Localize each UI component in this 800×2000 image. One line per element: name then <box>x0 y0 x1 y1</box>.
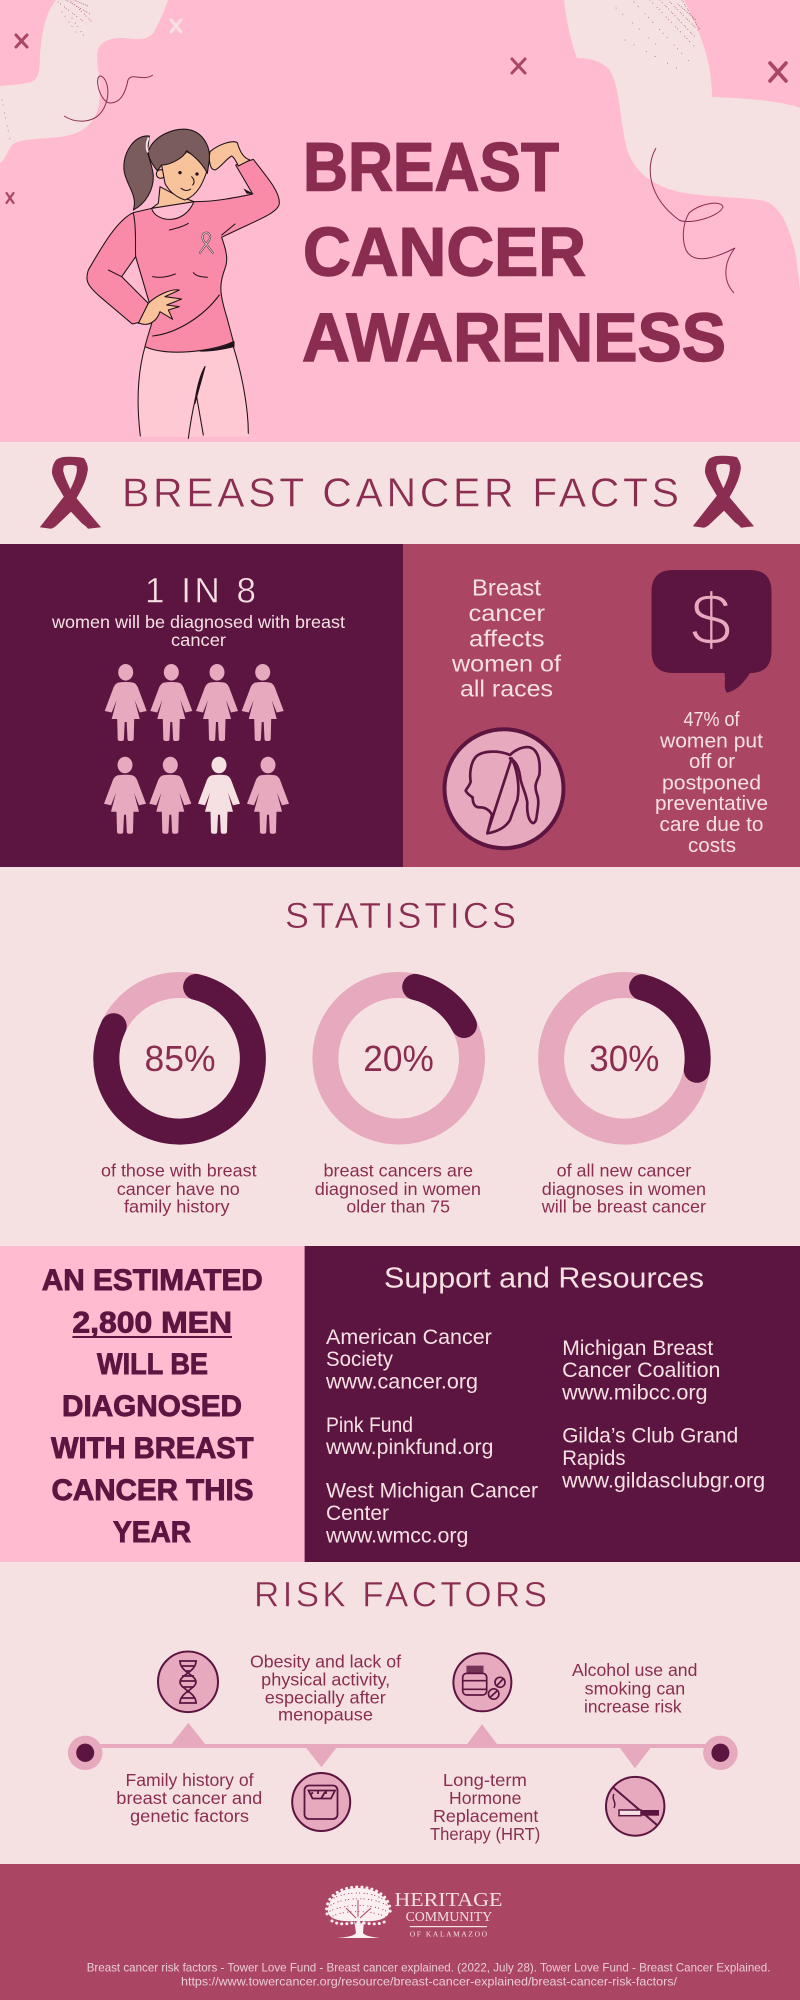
illustration: woman flexing with ribbon <box>87 129 279 438</box>
text: alcohol and smoking: Alcohol use and <box>572 1660 697 1680</box>
citation <box>87 1961 770 1989</box>
text: obesity: especially after <box>265 1687 386 1707</box>
resource list: right column: Gilda’s Club Grand <box>562 1425 738 1448</box>
caption: new diagnoses: diagnoses in women <box>542 1179 706 1199</box>
hero panel <box>0 0 800 442</box>
donut chart: 20 percent <box>325 985 472 1132</box>
text: obesity: physical activity, <box>261 1669 390 1689</box>
donut chart: 20 percent: 20% <box>363 1038 434 1079</box>
heading: breast cancer facts: BREAST CANCER FACTS <box>122 470 679 516</box>
panel: 2,800 men <box>0 1246 305 1562</box>
heading: statistics: STATISTICS <box>285 895 516 936</box>
callout text: AN ESTIMATED <box>42 1264 263 1297</box>
caption: no family history: of those with breast <box>101 1161 257 1181</box>
callout text: WITH BREAST <box>51 1432 254 1465</box>
resource list: left column <box>325 1326 538 1548</box>
text: family history <box>116 1770 262 1826</box>
resource list: left column: Society <box>326 1348 393 1371</box>
logo: heritage community of kalamazoo: HERITAGE <box>394 1889 502 1911</box>
text: obesity: Obesity and lack of <box>250 1651 401 1671</box>
text: 47 percent postponed care <box>655 709 768 857</box>
timeline <box>68 1723 738 1770</box>
donut chart: 30 percent <box>551 985 698 1132</box>
text: alcohol and smoking: increase risk <box>584 1696 682 1716</box>
icon: woman profile <box>444 729 564 848</box>
icon: pills <box>453 1653 511 1711</box>
callout text: WILL BE <box>97 1348 208 1381</box>
citation: https://www.towercancer.org/resource/breast-cancer-explained/breast-cancer-risk-factors/ <box>181 1975 678 1989</box>
stat: 1 in 8: 1 IN 8 <box>145 572 256 610</box>
caption: older than 75: diagnosed in women <box>315 1179 481 1199</box>
title: CANCER <box>303 214 586 290</box>
text: hormone therapy: Replacement <box>433 1806 538 1826</box>
caption: older than 75: breast cancers are <box>324 1161 473 1181</box>
text: hormone therapy <box>430 1770 540 1844</box>
logo: heritage community of kalamazoo: OF KALAMAZOO <box>410 1930 488 1939</box>
text: family history: Family history of <box>126 1770 254 1790</box>
resource list: left column: www.pinkfund.org <box>325 1436 493 1459</box>
icon row: women row one <box>105 664 284 741</box>
callout text: 2,800 MEN <box>72 1307 232 1340</box>
panel: races and cost <box>403 544 800 867</box>
text: obesity: menopause <box>278 1705 373 1725</box>
caption: no family history: cancer have no <box>117 1179 240 1199</box>
callout text <box>42 1264 263 1549</box>
resource list: right column <box>561 1337 765 1492</box>
panel: 1 in 8 <box>0 544 403 867</box>
caption: older than 75 <box>315 1161 481 1217</box>
text: 47 percent postponed care: women put <box>659 730 763 752</box>
text: family history: genetic factors <box>130 1806 249 1826</box>
resource list: left column: Center <box>326 1502 389 1525</box>
callout text: YEAR <box>113 1516 191 1549</box>
resource list: right column: Michigan Breast <box>562 1337 713 1360</box>
background blob: top right <box>564 0 800 290</box>
icon: ribbon right <box>693 456 754 528</box>
donut chart: 85 percent <box>106 985 253 1132</box>
text: affects women of all races: Breast <box>472 575 542 601</box>
text: family history: breast cancer and <box>116 1788 262 1808</box>
callout text: CANCER THIS <box>52 1474 254 1507</box>
icon: dollar speech bubble <box>652 570 772 693</box>
text: 47 percent postponed care: off or <box>689 751 735 773</box>
text: hormone therapy: Hormone <box>449 1788 521 1808</box>
icon: dollar speech bubble: $ <box>690 578 732 661</box>
heading: risk factors: RISK FACTORS <box>254 1576 547 1615</box>
title <box>302 128 726 376</box>
text: affects women of all races: all races <box>460 676 553 702</box>
text: alcohol and smoking: smoking can <box>585 1678 685 1698</box>
panel: statistics <box>0 867 800 1246</box>
text: women will be diagnosed: cancer <box>171 630 226 650</box>
text: affects women of all races <box>451 575 562 702</box>
text: 47 percent postponed care: 47% of <box>684 709 740 731</box>
text: hormone therapy: Therapy (HRT) <box>430 1824 540 1844</box>
caption: no family history <box>101 1161 257 1217</box>
donut chart: 30 percent: 30% <box>589 1038 659 1079</box>
text: 47 percent postponed care: care due to <box>660 814 764 836</box>
caption: no family history: family history <box>124 1197 230 1217</box>
resource list: right column: Cancer Coalition <box>562 1359 720 1382</box>
caption: new diagnoses: of all new cancer <box>557 1161 691 1181</box>
icon: ribbon left <box>40 457 101 529</box>
resource list: right column: Rapids <box>562 1447 626 1470</box>
text: 47 percent postponed care: costs <box>688 835 736 857</box>
facts heading band <box>0 442 800 544</box>
title: BREAST <box>303 128 559 206</box>
resource list: left column: Pink Fund <box>326 1414 413 1437</box>
squiggle left <box>64 75 153 121</box>
resource list: left column: www.cancer.org <box>325 1370 478 1393</box>
donut chart: 85 percent: 85% <box>144 1038 216 1079</box>
resource list: left column: www.wmcc.org <box>325 1525 468 1548</box>
text: affects women of all races: affects <box>469 626 544 652</box>
squiggle right <box>650 148 735 293</box>
background blob: top left <box>0 0 168 163</box>
callout text: DIAGNOSED <box>62 1390 242 1423</box>
panel: footer <box>0 1864 800 2000</box>
text: affects women of all races: cancer <box>468 600 545 626</box>
icon row: women row two <box>104 757 289 834</box>
resource list: right column: www.gildasclubgr.org <box>561 1469 765 1492</box>
resource list: right column: www.mibcc.org <box>561 1381 708 1404</box>
text: women will be diagnosed <box>51 612 345 650</box>
x marks <box>6 20 786 203</box>
text: hormone therapy: Long-term <box>443 1770 527 1790</box>
text: 47 percent postponed care: postponed <box>662 772 761 794</box>
caption: new diagnoses: will be breast cancer <box>541 1197 706 1217</box>
text: 47 percent postponed care: preventative <box>655 793 768 815</box>
logo: heritage community of kalamazoo <box>327 1887 502 1939</box>
text: affects women of all races: women of <box>451 651 562 677</box>
text: women will be diagnosed: women will be diagnosed with breast <box>51 612 345 632</box>
title: AWARENESS <box>302 299 726 376</box>
resource list: left column: American Cancer <box>326 1326 492 1349</box>
caption: new diagnoses <box>541 1161 706 1217</box>
citation: Breast cancer risk factors - Tower Love Fund - Breast cancer explained. (2022, July 28). Tower Love Fund - Breast Cancer Explained. <box>87 1961 770 1975</box>
resource list: left column: West Michigan Cancer <box>326 1480 538 1503</box>
panel: risk factors <box>0 1562 800 1864</box>
panel: support and resources <box>305 1246 800 1562</box>
speckles <box>2 0 700 140</box>
icon: no smoking <box>606 1777 664 1836</box>
logo: heritage community of kalamazoo: COMMUNITY <box>406 1909 493 1924</box>
text: obesity <box>250 1651 401 1725</box>
icon: dna <box>158 1652 218 1712</box>
text: alcohol and smoking <box>572 1660 697 1716</box>
heading: support and resources: Support and Resources <box>384 1262 704 1294</box>
caption: older than 75: older than 75 <box>346 1197 450 1217</box>
icon: weight scale <box>292 1773 350 1831</box>
